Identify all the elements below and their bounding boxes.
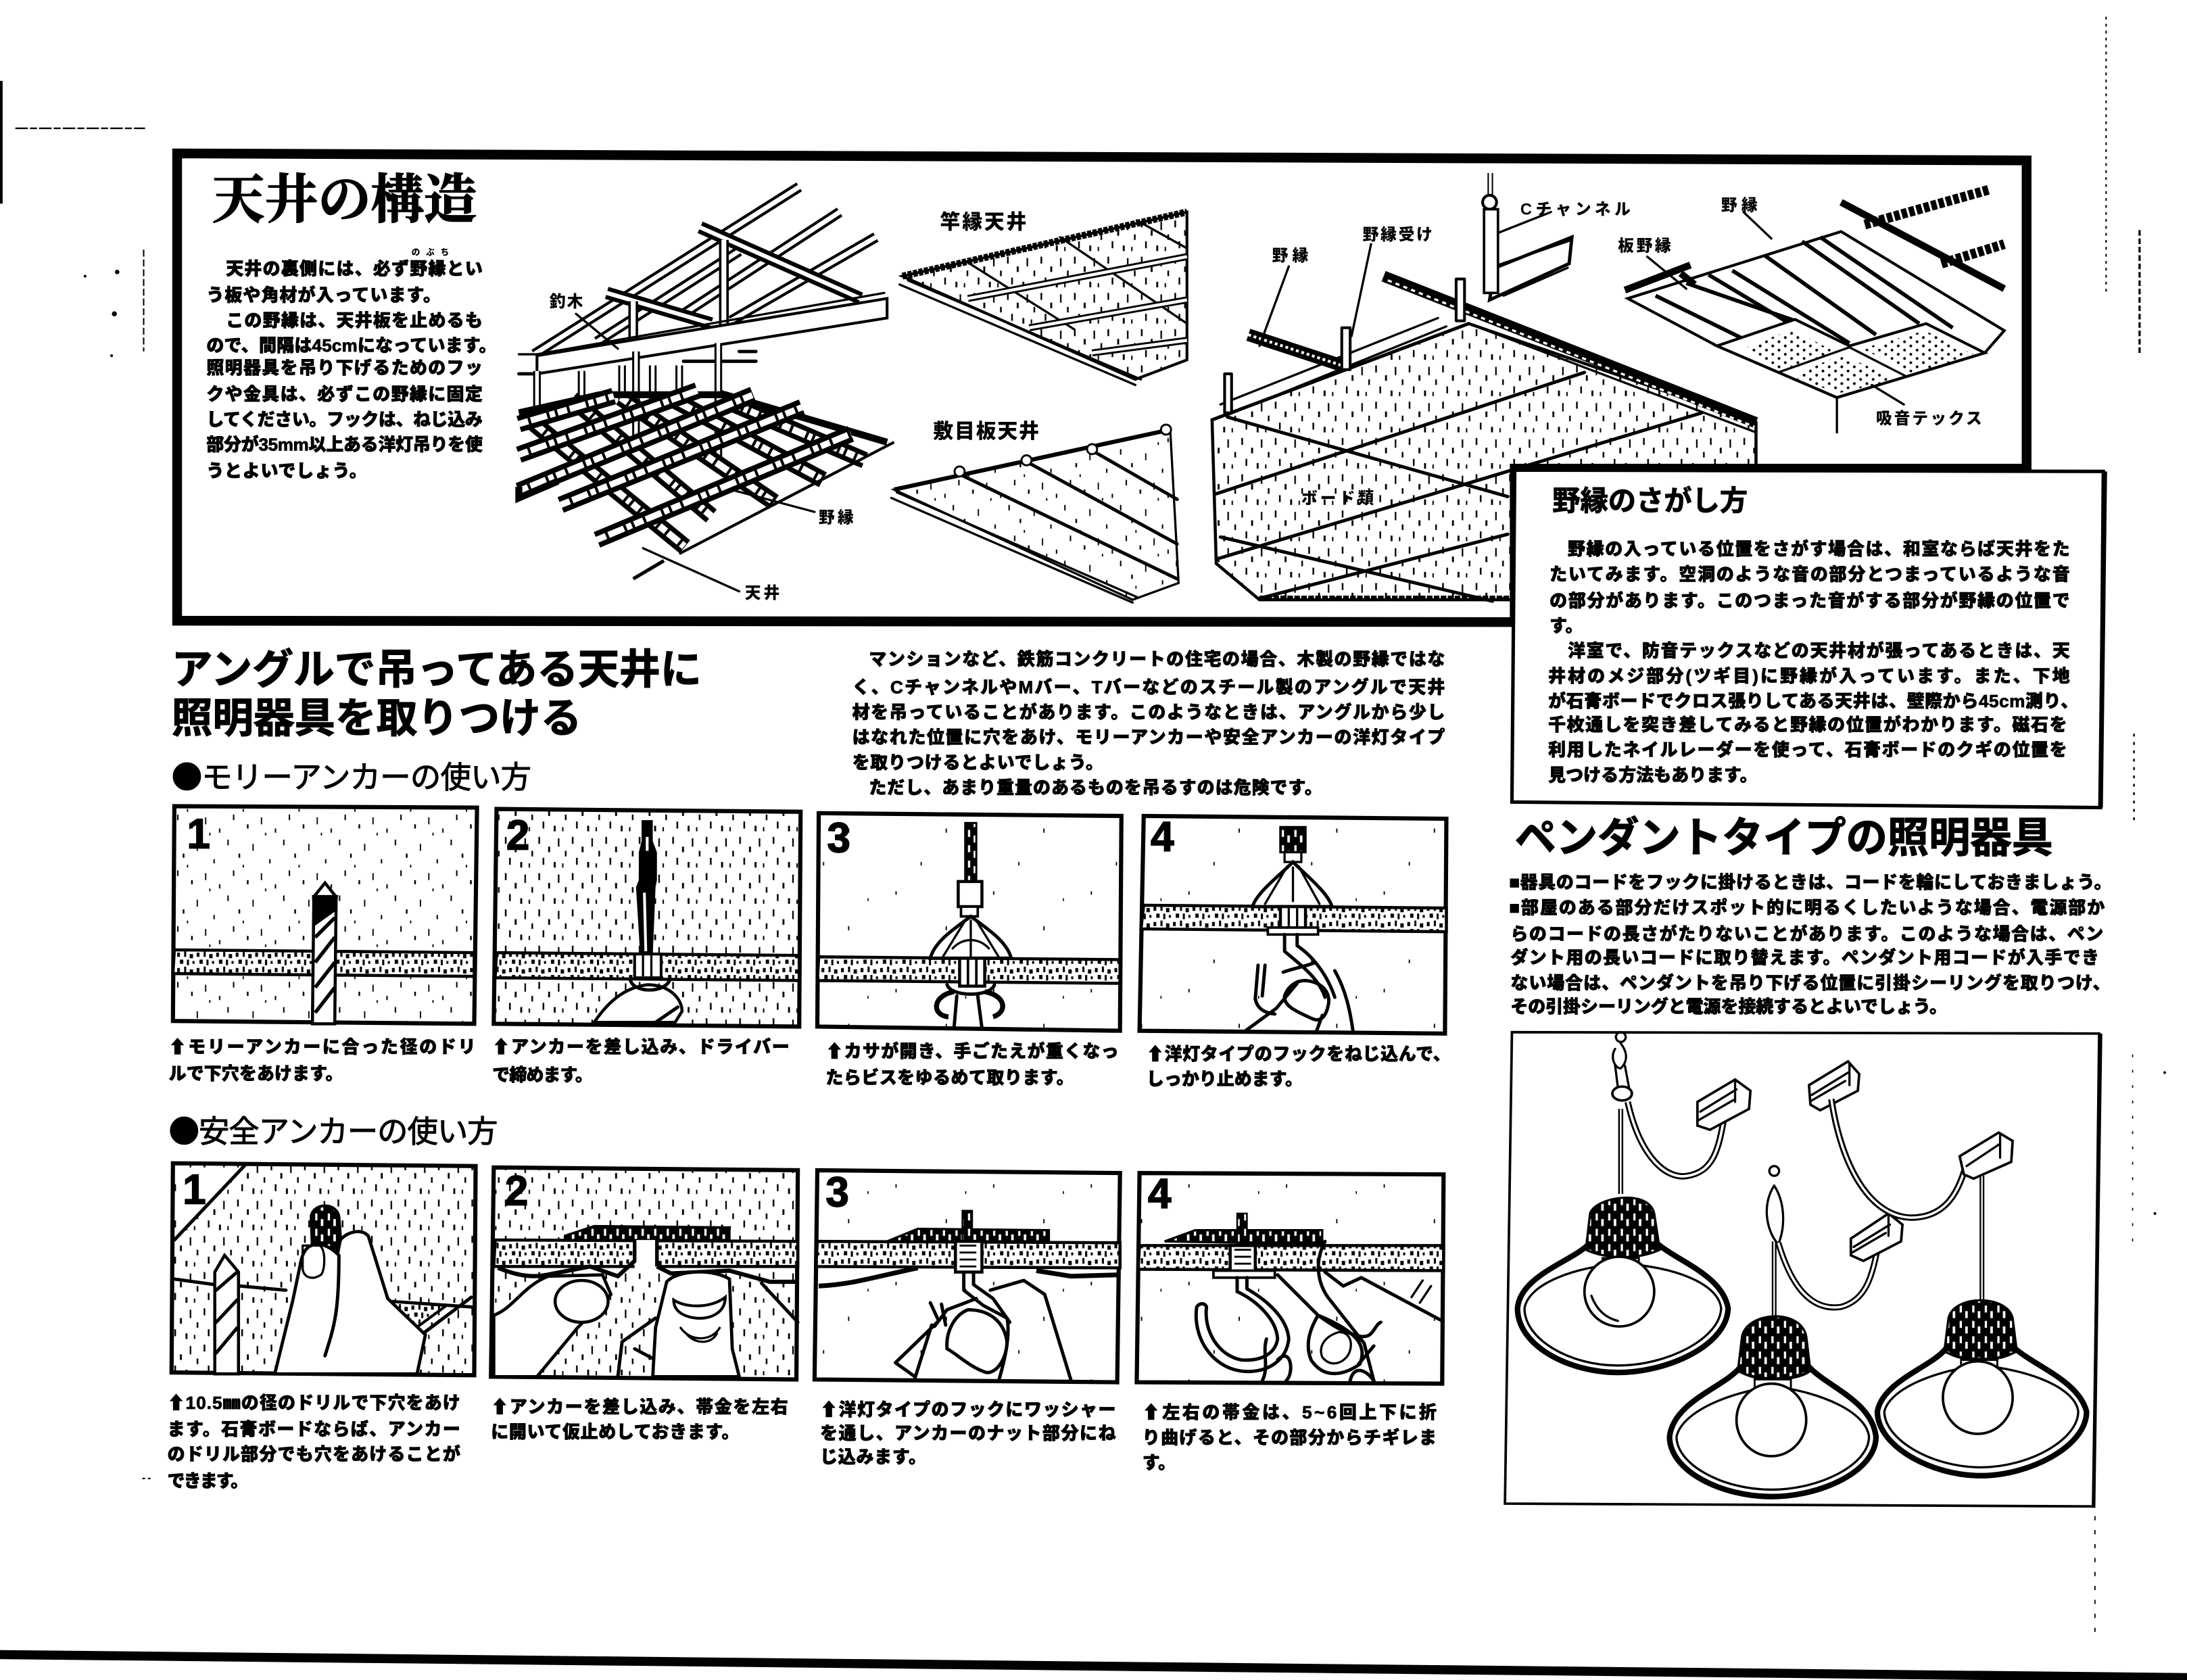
captions: safety anchor: できます。 (168, 1470, 248, 1491)
text body (1548, 539, 2078, 785)
hand (594, 985, 682, 1022)
panel: how to find joists (1512, 470, 2105, 808)
captions: molly anchor: ⬆洋灯タイプのフックをねじ込んで、 (1147, 1044, 1451, 1064)
heading: angle ceiling (172, 646, 702, 741)
text body: 野縁の入っている位置をさがす場合は、和室ならば天井をた (1568, 539, 2070, 559)
label: joist: 野縁 (819, 509, 854, 527)
diagram: saobuchi ceiling: 竿縁天井 (940, 211, 1026, 233)
step M1 (173, 806, 477, 1024)
label: board: ボード類 (1301, 489, 1374, 508)
captions: molly anchor: で締めます。 (492, 1065, 593, 1085)
captions: molly anchor (169, 1037, 1451, 1089)
captions: molly anchor: ⬆モリーアンカーに合った径のドリ (169, 1037, 476, 1057)
captions: molly anchor: ⬆アンカーを差し込み、ドライバー (492, 1037, 790, 1057)
captions: safety anchor: り曲げると、その部分からチギレま (1143, 1427, 1437, 1447)
captions: safety anchor: ⬆アンカーを差し込み、帯金を左右 (491, 1397, 788, 1417)
step M4: 4 (1151, 814, 1174, 861)
text: pendant lighting: らのコードの長さがたりないことがあります。このような場合は、ペン (1510, 924, 2103, 944)
step S2 (491, 1168, 798, 1379)
text: ceiling intro: ので、間隔は45cmになっています。 (206, 335, 496, 356)
label: C channel: Cチャンネル (1520, 201, 1631, 219)
text: angle ceiling intro: はなれた位置に穴をあけ、モリーアンカーや安全アンカーの洋灯タイプ (852, 727, 1445, 748)
text: angle ceiling intro (852, 649, 1445, 798)
captions: safety anchor: す。 (1143, 1452, 1176, 1472)
subheading: safety anchor: ●安全アンカーの使い方 (169, 1107, 498, 1152)
heading: pendant lighting: ペンダントタイプの照明器具 (1515, 815, 2053, 862)
hook (1196, 1278, 1289, 1372)
drill bit (215, 1255, 239, 1374)
captions: safety anchor: じ込みます。 (820, 1447, 926, 1467)
diagram: roof frame and ceiling joists (519, 187, 894, 602)
diagram: shikimeita ceiling (891, 420, 1178, 602)
text body: 井材のメジ部分(ツギ目)に野縁が入っています。また、下地 (1548, 666, 2070, 686)
text: pendant lighting: ■器具のコードをフックに掛けるときは、コードを輪にしておきましょう。 (1509, 872, 2112, 892)
title: 天井の構造 (212, 170, 477, 229)
anchor and fingers (311, 1206, 341, 1253)
label: ceiling: 天井 (745, 584, 779, 602)
text: ceiling intro: のぶち (412, 247, 449, 258)
captions: safety anchor: に開いて仮止めしておきます。 (491, 1422, 739, 1442)
text: ceiling intro: 照明器具を吊り下げるためのフッ (206, 358, 483, 378)
text: ceiling intro: う板や角材が入っています。 (206, 285, 441, 306)
captions: safety anchor: のドリル部分でも穴をあけることが (168, 1444, 460, 1464)
captions: molly anchor: ルで下穴をあけます。 (169, 1063, 343, 1084)
label: joist: 野縁 (1272, 247, 1308, 265)
text: ceiling intro: してください。フックは、ねじ込み (206, 409, 483, 429)
captions: safety anchor: ⬆左右の帯金は、5~6回上下に折 (1143, 1402, 1437, 1422)
text: angle ceiling intro: 材を吊っていることがあります。このようなときは、アングルから少し (852, 702, 1445, 723)
step S4: 4 (1148, 1171, 1172, 1218)
step M4 (1140, 814, 1446, 1034)
captions: safety anchor: ⬆10.5㎜の径のドリルで下穴をあけ (168, 1393, 460, 1413)
step M1: 1 (187, 811, 210, 857)
step M3: 3 (827, 815, 850, 862)
panel: ceiling structure (177, 153, 2027, 622)
captions: safety anchor: ⬆洋灯タイプのフックにワッシャー (820, 1399, 1116, 1420)
anchor (1280, 827, 1305, 853)
text: pendant lighting: その引掛シーリングと電源を接続するとよいでしょう。 (1510, 997, 1947, 1017)
diagram: plank ceiling with acoustic tile (1618, 190, 2004, 433)
text body: が石膏ボードでクロス張りしてある天井は、壁際から45cm測り、 (1548, 691, 2078, 711)
text: ceiling intro: この野縁は、天井板を止めるも (226, 310, 483, 331)
heading: angle ceiling: アングルで吊ってある天井に (172, 646, 702, 692)
step S1: 1 (183, 1166, 206, 1213)
step S4 (1136, 1171, 1443, 1384)
step M2: 2 (506, 812, 529, 859)
captions: safety anchor: を通し、アンカーのナット部分にね (820, 1423, 1116, 1443)
text: ceiling intro: 部分が35mm以上ある洋灯吊りを使 (206, 434, 483, 454)
text: angle ceiling intro: く、CチャンネルやMバー、Tバーなどのスチール製のアングルで天井 (852, 677, 1445, 697)
text: ceiling intro: クや金具は、必ずこの野縁に固定 (206, 384, 483, 404)
anchor (965, 823, 976, 882)
step S3 (815, 1170, 1120, 1383)
step M3 (817, 813, 1122, 1031)
text body: 利用したネイルレーダーを使って、石膏ボードのクギの位置を (1548, 740, 2067, 760)
text body: の部分があります。このつまった音がする部分が野縁の位置で (1549, 590, 2070, 610)
text: ceiling intro: 天井の裏側には、必ず野縁とい (226, 258, 483, 279)
screwdriver (636, 820, 657, 955)
label: joist receiver: 野縁受け (1363, 226, 1433, 244)
text: ceiling intro (206, 247, 496, 481)
captions: molly anchor: ⬆カサが開き、手ごたえが重くなっ (825, 1041, 1119, 1061)
text: angle ceiling intro: ただし、あまり重量のあるものを吊るすのは危険です。 (869, 777, 1322, 798)
heading: angle ceiling: 照明器具を取りつける (172, 695, 581, 741)
text body: 見つける方法もあります。 (1548, 765, 1758, 785)
heading: 野縁のさがし方 (1552, 485, 1748, 517)
text body: す。 (1549, 616, 1583, 636)
step S3: 3 (825, 1170, 849, 1216)
lamp 1 (1518, 1032, 1750, 1372)
lamp 2 (1670, 1166, 1902, 1497)
bottom black bar (0, 1650, 2187, 1680)
diagram: shikimeita ceiling: 敷目板天井 (933, 420, 1039, 443)
text body: 千枚通しを突き差してみると野縁の位置がわかります。磁石を (1548, 715, 2067, 735)
text: ceiling intro: うとよいでしょう。 (206, 461, 367, 481)
captions: molly anchor: たらビスをゆるめて取ります。 (825, 1067, 1074, 1088)
hand (1278, 1241, 1442, 1381)
lamp 3 with cords (1809, 1061, 2086, 1476)
hook and hand (964, 1274, 1010, 1322)
captions: safety anchor: ます。石膏ボードならば、アンカー (168, 1419, 460, 1439)
text: angle ceiling intro: マンションなど、鉄筋コンクリートの住宅の場合、木製の野縁ではな (869, 649, 1445, 669)
text: pendant lighting: ない場合は、ペンダントを吊り下げる位置に引掛シーリングを取りつけ、 (1510, 973, 2111, 993)
captions: molly anchor: しっかり止めます。 (1147, 1069, 1303, 1089)
step M2 (494, 809, 800, 1026)
text: pendant lighting (1509, 872, 2112, 1017)
text body: たいてみます。空洞のような音の部分とつまっているような音 (1549, 564, 2070, 584)
captions: safety anchor (168, 1393, 1437, 1491)
step S1 (172, 1163, 476, 1375)
label: hanging wood: 釣木 (550, 293, 583, 311)
diagram: C-channel board ceiling (1212, 173, 1756, 601)
drill bit (312, 883, 336, 1024)
text: pendant lighting: ダント用の長いコードに取り替えます。ペンダント用コードが入手でき (1510, 948, 2099, 968)
label: plank joist: 板野縁 (1618, 237, 1671, 255)
label: acoustic tex: 吸音テックス (1876, 410, 1982, 428)
subheading: molly anchor: ●モリーアンカーの使い方 (172, 753, 531, 798)
diagram: saobuchi ceiling (900, 211, 1187, 385)
text: pendant lighting: ■部屋のある部分だけスポット的に明るくしたいような場合、電源部か (1509, 897, 2105, 917)
panel: pendant lamps illustration (1505, 1032, 2100, 1508)
label: joist: 野縁 (1721, 197, 1758, 215)
hook and hand (1284, 934, 1335, 997)
text: angle ceiling intro: を取りつけるとよいでしょう。 (852, 752, 1103, 773)
step S2: 2 (505, 1168, 528, 1215)
text body: 洋室で、防音テックスなどの天井材が張ってあるときは、天 (1568, 641, 2070, 661)
hands (494, 1275, 611, 1376)
